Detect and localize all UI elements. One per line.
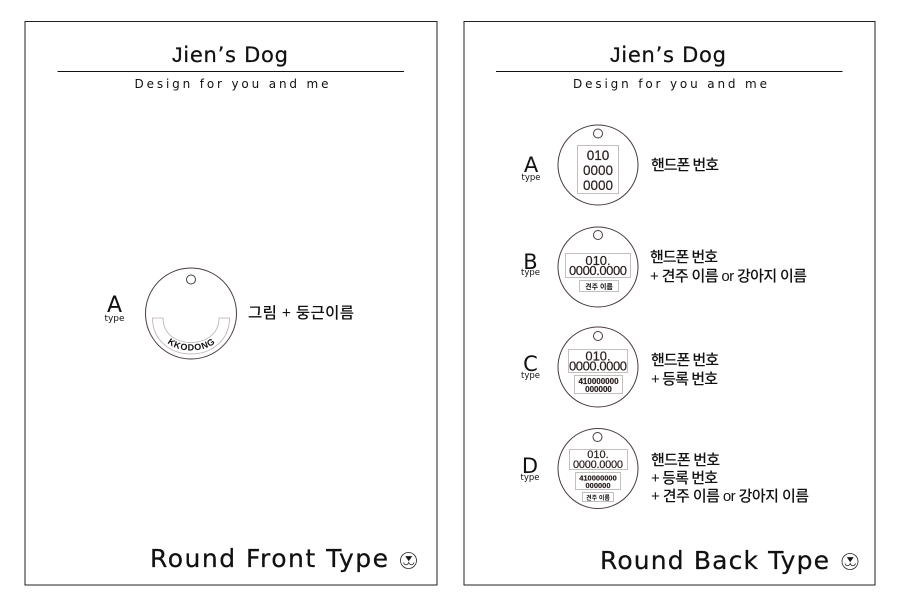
type label A bbox=[522, 153, 540, 183]
type label C: type bbox=[521, 371, 540, 381]
description: 그림 + 둥근이름 bbox=[248, 304, 354, 322]
tag C bbox=[558, 327, 638, 407]
heading: Jien's Dog: Jien’s Dog bbox=[610, 43, 726, 67]
type label C: C bbox=[523, 352, 538, 376]
type label D: type bbox=[520, 473, 540, 483]
footer title: Round Front Type bbox=[150, 544, 388, 573]
tag A: 010 bbox=[587, 148, 609, 163]
tag D: 410000000 bbox=[579, 474, 617, 482]
tag B: 0000.0000 bbox=[569, 263, 627, 278]
curved name text: KKODONG bbox=[168, 338, 214, 350]
tag A: 0000 bbox=[583, 178, 613, 193]
tag D: 010. bbox=[587, 449, 609, 461]
tag B: 010. bbox=[585, 253, 611, 268]
type label A: type bbox=[104, 314, 125, 324]
tag C: 0000.0000 bbox=[569, 358, 627, 374]
tag D: 0000.0000 bbox=[573, 459, 623, 471]
description B: + 견주 이름 or 강아지 이름 bbox=[650, 268, 807, 285]
type label B: type bbox=[521, 268, 540, 278]
icon: dog face bbox=[400, 552, 416, 568]
description B bbox=[650, 249, 807, 285]
description B: 핸드폰 번호 bbox=[650, 249, 718, 266]
tag C: 000000 bbox=[585, 385, 612, 394]
tag A: 0000 bbox=[583, 163, 613, 178]
description D bbox=[651, 452, 809, 505]
tag A bbox=[558, 125, 638, 205]
icon: dog face bbox=[842, 554, 858, 570]
description D: 핸드폰 번호 bbox=[651, 452, 720, 469]
type label A bbox=[104, 293, 125, 324]
panel: round front type bbox=[24, 21, 438, 586]
type label D: D bbox=[522, 454, 538, 478]
type label A: A bbox=[107, 293, 122, 318]
tag D: 견주 이름 bbox=[586, 494, 610, 502]
type label B: B bbox=[523, 250, 538, 274]
tag C: 410000000 bbox=[578, 377, 619, 386]
tag D bbox=[558, 428, 638, 508]
type label C bbox=[521, 352, 540, 381]
description A: 핸드폰 번호 bbox=[651, 157, 719, 174]
footer title: Round Back Type bbox=[600, 546, 829, 575]
description C: 핸드폰 번호 bbox=[651, 352, 719, 369]
description D: + 견주 이름 or 강아지 이름 bbox=[651, 488, 809, 505]
heading: Jien's Dog: Jien’s Dog bbox=[172, 43, 288, 67]
subtitle: Design for you and me bbox=[573, 77, 767, 91]
description C bbox=[651, 352, 719, 388]
panel: round back type bbox=[464, 22, 875, 585]
tag D: 000000 bbox=[585, 481, 611, 490]
description D: + 등록 번호 bbox=[651, 470, 718, 487]
tag B bbox=[558, 227, 638, 307]
description C: + 등록 번호 bbox=[651, 371, 718, 388]
subtitle: Design for you and me bbox=[134, 77, 328, 91]
tag B: 견주 이름 bbox=[585, 282, 613, 291]
type label B bbox=[521, 250, 540, 278]
tag: front with curved name bbox=[145, 268, 237, 360]
type label A: type bbox=[522, 173, 540, 183]
type label A: A bbox=[524, 153, 539, 177]
tag C: 010. bbox=[585, 348, 611, 364]
